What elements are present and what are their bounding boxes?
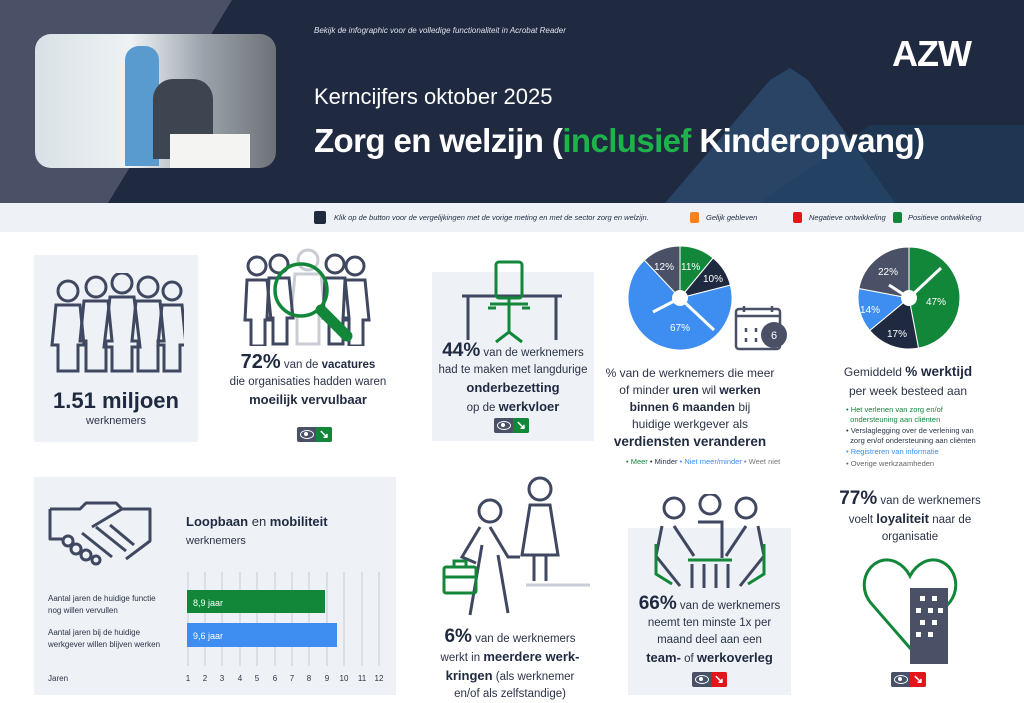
panel: onderbezetting bbox=[432, 272, 594, 441]
legend list: ondersteuning aan cliënten bbox=[850, 414, 940, 424]
text: had te maken met langdurige bbox=[439, 364, 587, 376]
panel: loopbaan bbox=[34, 477, 396, 695]
bar chart: 4 bbox=[238, 674, 243, 683]
button bbox=[494, 418, 529, 433]
icon: calendar: 6 bbox=[771, 330, 777, 342]
title: Zorg en welzijn (inclusief Kinderopvang) bbox=[314, 122, 924, 159]
legend: orange bbox=[690, 212, 699, 223]
bar chart: 9,6 jaar bbox=[193, 631, 223, 641]
icon: heart building bbox=[862, 558, 958, 664]
pie chart: 22% bbox=[878, 267, 898, 278]
text: voelt loyaliteit naar de bbox=[849, 511, 971, 526]
pie chart bbox=[628, 246, 732, 350]
text bbox=[839, 488, 981, 543]
text: kringen (als werknemer bbox=[446, 668, 574, 683]
bar chart: Jaren bbox=[48, 674, 68, 683]
panel: werktijd pie bbox=[844, 248, 976, 468]
legend bar: Gelijk gebleven bbox=[706, 213, 757, 222]
pie chart: 10% bbox=[703, 274, 723, 285]
text: organisatie bbox=[882, 531, 938, 543]
legend bar bbox=[0, 203, 1024, 232]
photo bbox=[35, 34, 276, 168]
text: moeilijk vervulbaar bbox=[249, 392, 367, 407]
button bbox=[692, 672, 727, 687]
text: en/of als zelfstandige) bbox=[454, 688, 566, 700]
bar chart: nog willen vervullen bbox=[48, 606, 118, 615]
text: per week besteed aan bbox=[849, 384, 967, 398]
text: 77% van de werknemers bbox=[839, 488, 981, 509]
button bbox=[297, 427, 332, 442]
text: maand deel aan een bbox=[657, 634, 762, 646]
icon: desk chair bbox=[462, 260, 562, 344]
panel: loyaliteit bbox=[839, 488, 981, 687]
text: werkt in meerdere werk- bbox=[441, 649, 579, 664]
header bbox=[0, 0, 1024, 203]
panel: teamoverleg bbox=[628, 528, 791, 695]
button: ↘ bbox=[913, 672, 923, 686]
legend: • Meer • Minder • Niet meer/minder • Weet niet bbox=[626, 457, 780, 466]
button: ↘ bbox=[319, 427, 329, 441]
pie chart: 67% bbox=[670, 323, 690, 334]
bar chart: Aantal jaren de huidige functie bbox=[48, 594, 156, 603]
logo AZW: AZW bbox=[892, 33, 971, 74]
text bbox=[606, 366, 774, 449]
legend list: zorg en/of ondersteuning aan cliënten bbox=[850, 436, 976, 444]
legend bar: Negatieve ontwikkeling bbox=[809, 213, 886, 222]
header background shapes bbox=[0, 0, 1024, 203]
button: ↘ bbox=[714, 672, 724, 686]
pie chart: 12% bbox=[654, 262, 674, 273]
icon: handshake bbox=[48, 502, 152, 566]
heading: Loopbaan en mobiliteit bbox=[186, 514, 328, 529]
text: 66% van de werknemers bbox=[639, 593, 780, 614]
bar chart: 11 bbox=[358, 674, 367, 683]
legend: red bbox=[793, 212, 802, 223]
text: Gemiddeld % werktijd bbox=[844, 364, 972, 379]
panel: loopbaan: werknemers bbox=[186, 535, 246, 547]
bar chart: werkgever willen blijven werken bbox=[47, 640, 160, 649]
panel: werknemers bbox=[34, 255, 198, 442]
text: of minder uren wil werken bbox=[619, 383, 761, 397]
icon: calendar bbox=[734, 306, 787, 350]
bar chart: 8,9 jaar bbox=[193, 598, 223, 608]
bar chart: 2 bbox=[203, 674, 208, 683]
button bbox=[891, 672, 926, 687]
bar chart: 7 bbox=[290, 674, 295, 683]
icon: walking people bbox=[442, 476, 590, 616]
text: % van de werknemers die meer bbox=[606, 366, 774, 380]
bar chart: Aantal jaren bij de huidige bbox=[48, 628, 141, 637]
text: 6% van de werknemers bbox=[444, 626, 576, 647]
legend bar: Klik op de button voor de vergelijkingen met de vorige meting en met de sector zorg en welzijn. bbox=[334, 213, 649, 222]
button: ↘ bbox=[516, 418, 526, 432]
bar chart: 5 bbox=[255, 674, 260, 683]
bar chart: 8 bbox=[307, 674, 312, 683]
pie chart: 14% bbox=[860, 305, 880, 316]
text bbox=[844, 364, 972, 398]
text: op de werkvloer bbox=[467, 399, 559, 414]
text: team- of werkoverleg bbox=[646, 650, 773, 665]
icon: meeting bbox=[654, 494, 766, 588]
text: neemt ten minste 1x per bbox=[648, 617, 771, 629]
text: 72% van de vacatures bbox=[241, 351, 375, 373]
panel: uren pie bbox=[606, 246, 787, 466]
pie chart bbox=[858, 248, 960, 348]
text bbox=[639, 593, 780, 665]
pie chart: 17% bbox=[887, 329, 907, 340]
bar chart: 1 bbox=[186, 674, 191, 683]
legend list: • Het verlenen van zorg en/of bbox=[846, 405, 943, 414]
subtitle: Kerncijfers oktober 2025 bbox=[314, 84, 552, 109]
panel: meerdere werkkringen bbox=[440, 476, 590, 700]
text: binnen 6 maanden bij bbox=[630, 400, 750, 414]
legend list: • Registreren van informatie bbox=[846, 447, 939, 456]
legend: eye bbox=[314, 211, 326, 224]
legend list: • Overige werkzaamheden bbox=[846, 458, 934, 468]
text bbox=[230, 351, 386, 407]
bar chart: 12 bbox=[375, 674, 384, 683]
legend list: • Verslaglegging over de verlening van bbox=[846, 426, 974, 435]
bar chart: 9 bbox=[325, 674, 330, 683]
bar chart: 6 bbox=[273, 674, 278, 683]
note: Bekijk de infographic voor de volledige functionaliteit in Acrobat Reader bbox=[314, 26, 566, 35]
legend: green bbox=[893, 212, 902, 223]
panel: vacatures bbox=[230, 248, 386, 442]
pie chart: 47% bbox=[926, 297, 946, 308]
bar chart bbox=[47, 572, 384, 683]
text: verdiensten veranderen bbox=[614, 434, 766, 449]
text bbox=[439, 340, 587, 414]
text: die organisaties hadden waren bbox=[230, 376, 386, 388]
text: huidige werkgever als bbox=[632, 417, 748, 431]
icon: people bbox=[50, 273, 184, 372]
stat: 1.51 miljoen bbox=[53, 388, 179, 413]
text: 44% van de werknemers bbox=[442, 340, 584, 361]
legend bar: Positieve ontwikkeling bbox=[908, 213, 981, 222]
bar chart: 10 bbox=[340, 674, 349, 683]
bar chart: 3 bbox=[220, 674, 225, 683]
text bbox=[440, 626, 579, 700]
icon: people with magnifier bbox=[243, 248, 371, 346]
legend list bbox=[846, 405, 976, 468]
pie chart: 11% bbox=[681, 262, 700, 273]
text: onderbezetting bbox=[466, 380, 560, 395]
panel: werknemers: werknemers bbox=[86, 415, 146, 427]
